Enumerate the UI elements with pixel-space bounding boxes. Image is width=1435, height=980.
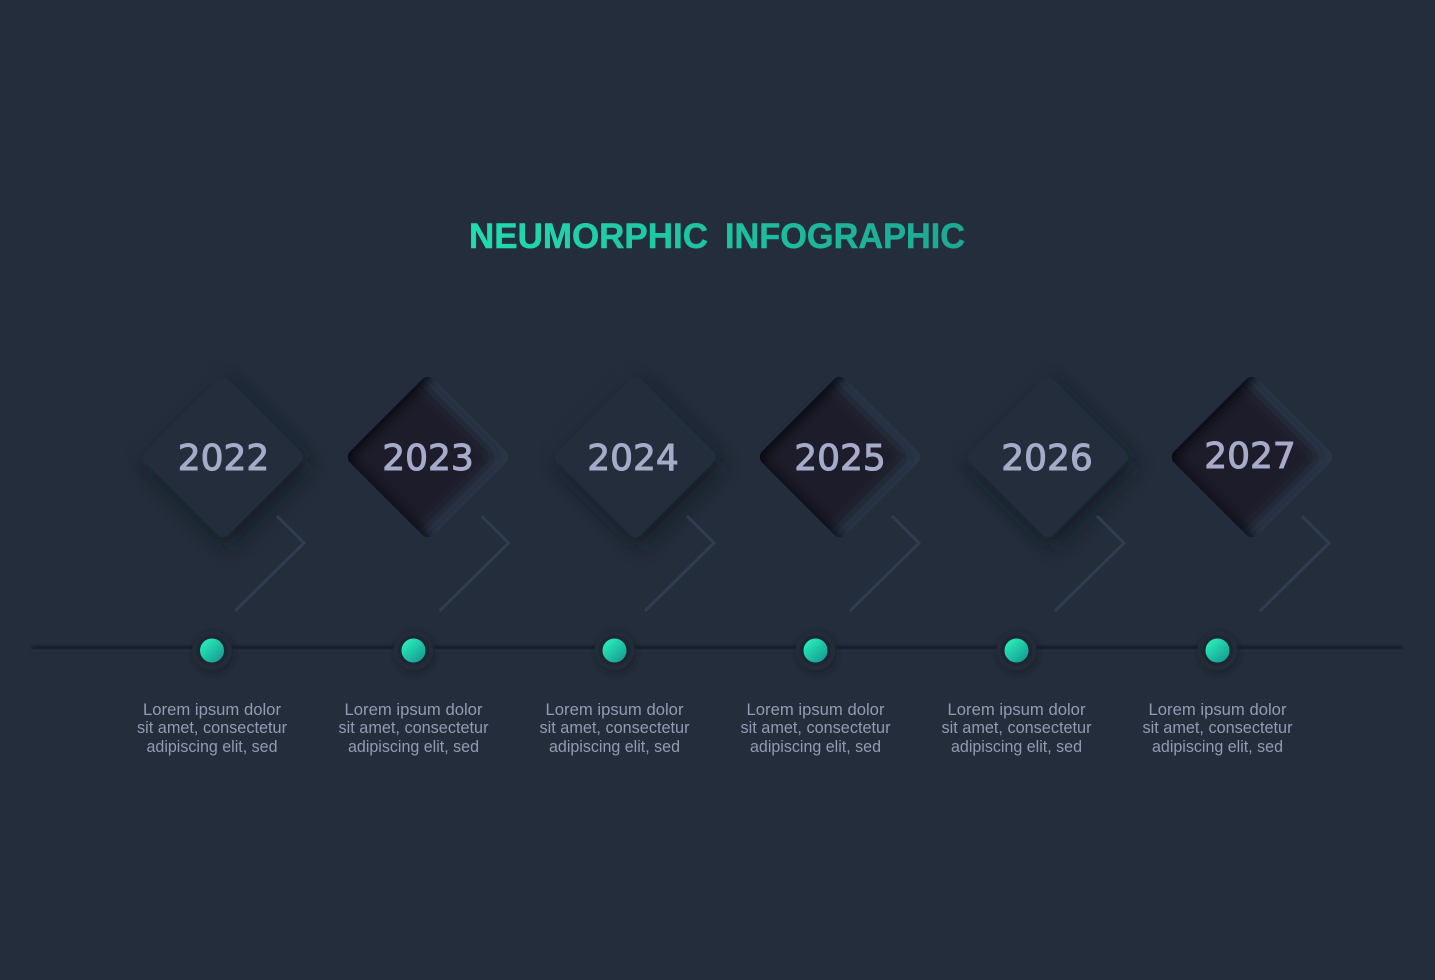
year tile 2026 (raised): 2026 — [1001, 438, 1093, 479]
year tile 2027 (inset): 2027 — [1204, 436, 1296, 477]
arrow 2023 — [440, 516, 508, 611]
arrow 2025 — [850, 516, 919, 611]
node 2023 — [394, 630, 435, 673]
text block 2024: adipiscing elit, sed — [549, 738, 680, 756]
text block 2022 — [137, 701, 287, 756]
arrow 2027 — [1260, 516, 1329, 611]
year tile 2024 (raised): 2024 — [587, 438, 679, 479]
year tile 2023 (inset) — [348, 377, 508, 537]
node 2027 — [1198, 630, 1239, 673]
year tile 2022 (raised): 2022 — [178, 438, 269, 479]
text block 2023: sit amet, consectetur — [338, 719, 489, 737]
node 2024 — [594, 630, 636, 673]
text block 2027: Lorem ipsum dolor — [1148, 701, 1287, 719]
text block 2026: sit amet, consectetur — [942, 719, 1092, 737]
node 2026 — [996, 630, 1038, 673]
text block 2025: sit amet, consectetur — [740, 719, 891, 737]
year tile 2024 (raised) — [547, 369, 724, 548]
title — [469, 217, 965, 256]
text block 2022: adipiscing elit, sed — [146, 738, 278, 756]
title: NEUMORPHIC — [469, 217, 708, 256]
text block 2023 — [338, 701, 489, 756]
text block 2027: adipiscing elit, sed — [1152, 738, 1283, 756]
year tile 2027 (inset) — [1172, 377, 1332, 537]
year tile 2023 (inset): 2023 — [382, 438, 474, 479]
year tile 2025 (inset): 2025 — [794, 438, 886, 479]
text block 2025: adipiscing elit, sed — [750, 738, 881, 756]
node 2025 — [796, 630, 837, 673]
text block 2024: sit amet, consectetur — [540, 719, 690, 737]
year tile 2026 (raised) — [960, 369, 1136, 548]
text block 2024 — [540, 701, 690, 756]
arrow 2026 — [1055, 516, 1124, 611]
year tile 2025 (inset) — [760, 377, 920, 537]
text block 2027: sit amet, consectetur — [1142, 719, 1293, 737]
text block 2023: adipiscing elit, sed — [348, 738, 479, 756]
text block 2025 — [740, 701, 891, 756]
timeline line — [32, 646, 1402, 651]
text block 2024: Lorem ipsum dolor — [546, 701, 684, 719]
arrow 2022 — [235, 516, 304, 611]
text block 2026 — [942, 701, 1092, 756]
text block 2026: Lorem ipsum dolor — [948, 701, 1086, 719]
text block 2022: sit amet, consectetur — [137, 719, 287, 737]
arrow 2024 — [645, 516, 714, 611]
text block 2026: adipiscing elit, sed — [951, 738, 1082, 756]
title: INFOGRAPHIC — [725, 217, 965, 256]
text block 2022: Lorem ipsum dolor — [143, 701, 282, 719]
node 2022 — [192, 630, 234, 673]
text block 2023: Lorem ipsum dolor — [344, 701, 483, 719]
year tile 2022 (raised) — [135, 369, 311, 548]
text block 2027 — [1142, 701, 1293, 756]
text block 2025: Lorem ipsum dolor — [746, 701, 885, 719]
